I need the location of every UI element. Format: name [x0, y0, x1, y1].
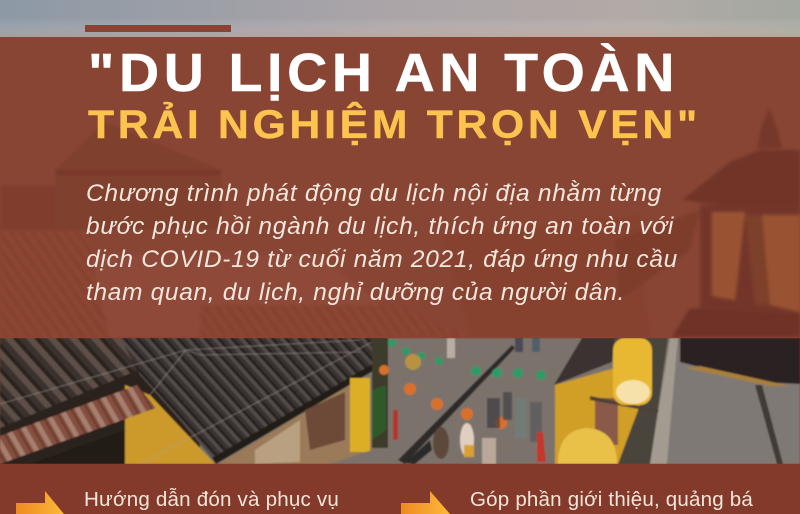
left roof [0, 338, 140, 434]
left item text: Hướng dẫn đón và phục vụ [84, 488, 339, 511]
wires [0, 340, 372, 464]
right yellow building [555, 368, 640, 464]
icon: right arrow [401, 491, 450, 514]
street [366, 450, 371, 453]
faint photo behind the panel [0, 108, 800, 337]
intro paragraph: dịch COVID-19 từ cuối năm 2021, đáp ứng nhu cầu [86, 246, 678, 273]
yellow lanterns [613, 338, 652, 405]
main roof [120, 338, 378, 462]
faint lantern tower [757, 108, 782, 148]
icon: left arrow [16, 491, 64, 514]
intro paragraph: bước phục hồi ngành du lịch, thích ứng an toàn với [86, 213, 674, 240]
rust roof [0, 385, 156, 464]
people [405, 338, 542, 464]
panel: intro background [0, 37, 800, 338]
stone ledge [650, 338, 678, 464]
sky background [0, 0, 800, 37]
deck [667, 338, 800, 464]
intro paragraph [86, 180, 678, 306]
title: line 2: TRẢI NGHIỆM TRỌN VẸN" [88, 101, 701, 147]
panel: bottom band [0, 464, 800, 514]
right item text: Góp phần giới thiệu, quảng bá [470, 488, 753, 511]
shop front [218, 376, 372, 464]
photo: Hoi An street [0, 338, 800, 464]
intro paragraph: Chương trình phát động du lịch nội địa nhằm từng [86, 180, 662, 207]
yellow wall [125, 385, 215, 464]
right stone wall [612, 338, 668, 464]
green lanterns [388, 339, 546, 380]
orange lanterns [379, 365, 507, 429]
accent bar [85, 25, 231, 32]
intro paragraph: tham quan, du lịch, nghỉ dưỡng của người dân. [86, 279, 625, 306]
title: line 1: "DU LỊCH AN TOÀN [88, 43, 679, 103]
